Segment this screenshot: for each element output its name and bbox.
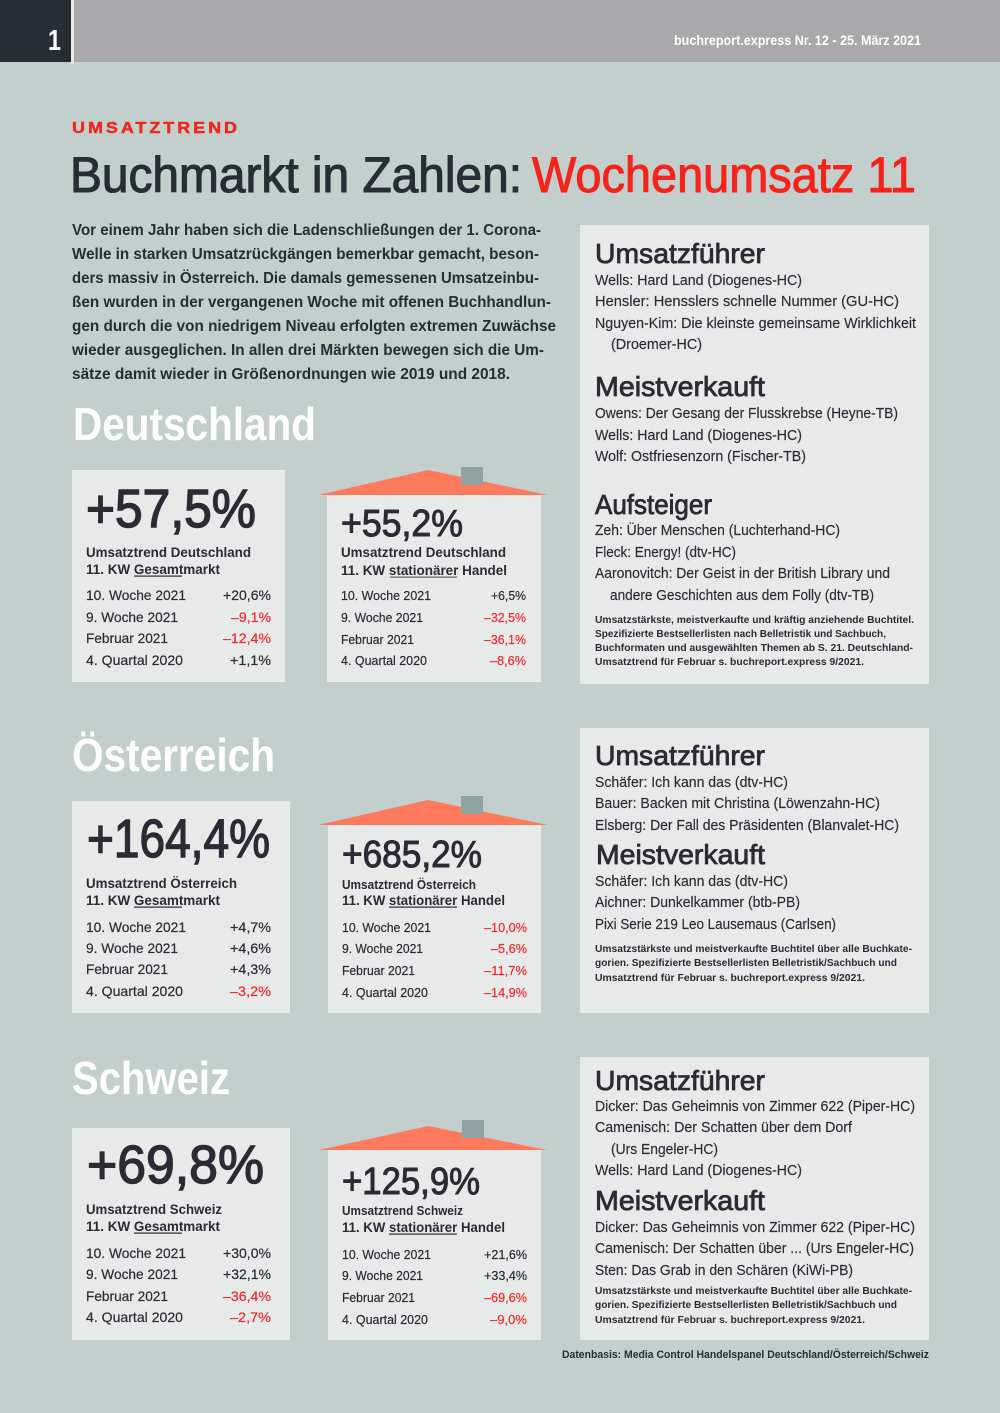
panel: Deutschland Bestseller: Owens: Der Gesang der Flusskrebse (Heyne-TB) xyxy=(595,406,898,422)
panel: Schweiz stationärer Handel xyxy=(319,1120,547,1340)
panel: Österreich Bestseller: Bauer: Backen mit Christina (Löwenzahn-HC) xyxy=(595,796,880,812)
panel: Österreich Gesamtmarkt: –3,2% xyxy=(230,983,271,999)
panel: Schweiz Bestseller: Camenisch: Der Schatten über ... (Urs Engeler-HC) xyxy=(595,1241,914,1257)
kicker: UMSATZTREND xyxy=(72,120,240,137)
panel: Österreich Gesamtmarkt: +4,7% xyxy=(230,919,271,935)
panel: Österreich Gesamtmarkt: 10. Woche 2021 xyxy=(86,919,186,935)
panel: Schweiz stationärer Handel: 4. Quartal 2020 xyxy=(342,1312,428,1327)
panel: Deutschland Bestseller: Meistverkauft xyxy=(595,371,765,402)
panel: Deutschland stationärer Handel: +55,2% xyxy=(341,503,463,545)
panel: Österreich Bestseller: gorien. Spezifizierte Bestsellerlisten Belletristik/Sachbuch und xyxy=(595,957,897,969)
panel: Deutschland Gesamtmarkt: Februar 2021 xyxy=(86,630,168,646)
panel: Deutschland Gesamtmarkt: Umsatztrend Deutschland xyxy=(86,544,251,560)
panel: Deutschland Bestseller: Aufsteiger xyxy=(595,489,712,520)
panel: Österreich Bestseller: Elsberg: Der Fall des Präsidenten (Blanvalet-HC) xyxy=(595,818,899,834)
panel: Deutschland Gesamtmarkt: +20,6% xyxy=(223,587,271,603)
panel: Schweiz Bestseller: (Urs Engeler-HC) xyxy=(611,1142,718,1158)
panel: Schweiz Gesamtmarkt xyxy=(72,1128,290,1340)
panel: Deutschland Bestseller: Wolf: Ostfriesenzorn (Fischer-TB) xyxy=(595,449,806,465)
intro text: wieder ausgeglichen. In allen drei Märkten bewegen sich die Um- xyxy=(71,342,544,359)
panel: Schweiz stationärer Handel: 11. KW stationärer Handel xyxy=(342,1219,505,1235)
panel: Schweiz stationärer Handel: +125,9% xyxy=(342,1161,480,1203)
panel: Deutschland Gesamtmarkt: –9,1% xyxy=(231,609,271,625)
panel: Schweiz Gesamtmarkt: 10. Woche 2021 xyxy=(86,1245,186,1261)
panel: Deutschland Gesamtmarkt: –12,4% xyxy=(223,630,271,646)
panel: Deutschland Gesamtmarkt: 11. KW Gesamtmarkt xyxy=(86,561,220,577)
panel: Österreich stationärer Handel: –10,0% xyxy=(484,920,527,935)
panel: Österreich stationärer Handel: 9. Woche 2021 xyxy=(342,941,423,956)
panel: Österreich Bestseller: Umsatztrend für Februar s. buchreport.express 9/2021. xyxy=(595,972,865,984)
panel: Schweiz Gesamtmarkt: 4. Quartal 2020 xyxy=(86,1309,183,1325)
panel: Österreich Gesamtmarkt: 9. Woche 2021 xyxy=(86,940,178,956)
panel: Deutschland stationärer Handel: 4. Quartal 2020 xyxy=(341,653,427,668)
panel: Schweiz Bestseller: gorien. Spezifizierte Bestsellerlisten Belletristik/Sachbuch und xyxy=(595,1299,897,1311)
panel: Schweiz Gesamtmarkt: 9. Woche 2021 xyxy=(86,1266,178,1282)
panel: Schweiz stationärer Handel: 10. Woche 2021 xyxy=(342,1247,431,1262)
header bar: 1 xyxy=(48,25,61,57)
panel: Deutschland Gesamtmarkt: +1,1% xyxy=(230,652,271,668)
panel: Schweiz Gesamtmarkt: +30,0% xyxy=(223,1245,271,1261)
panel: Österreich stationärer Handel: Umsatztrend Österreich xyxy=(342,877,476,892)
panel: Deutschland stationärer Handel: –8,6% xyxy=(490,653,526,668)
panel: Deutschland stationärer Handel xyxy=(318,467,548,682)
intro text xyxy=(71,222,556,383)
panel: Österreich Gesamtmarkt xyxy=(72,801,290,1013)
title: Buchmarkt in Zahlen: xyxy=(70,147,522,203)
panel: Österreich stationärer Handel: –14,9% xyxy=(484,985,527,1000)
panel: Deutschland Gesamtmarkt: 4. Quartal 2020 xyxy=(86,652,183,668)
panel: Österreich Bestseller: Schäfer: Ich kann das (dtv-HC) xyxy=(595,775,788,791)
intro text: gen durch die von niedrigem Niveau erfolgten extremen Zuwächse xyxy=(72,318,556,335)
panel: Schweiz Gesamtmarkt: 11. KW Gesamtmarkt xyxy=(86,1218,220,1234)
panel: Schweiz Gesamtmarkt: –36,4% xyxy=(223,1288,271,1304)
panel: Österreich stationärer Handel: 4. Quartal 2020 xyxy=(342,985,428,1000)
header bar: buchreport.express Nr. 12 - 25. März 2021 xyxy=(674,33,921,48)
panel: Deutschland Bestseller: Umsatzführer xyxy=(595,238,765,269)
panel: Deutschland Bestseller xyxy=(580,225,929,684)
panel: Deutschland Bestseller: Spezifizierte Bestsellerlisten nach Belletristik und Sachbuch, xyxy=(595,628,886,640)
panel: Deutschland Bestseller: andere Geschichten aus dem Folly (dtv-TB) xyxy=(610,588,874,604)
panel: Deutschland Gesamtmarkt: 10. Woche 2021 xyxy=(86,587,186,603)
panel: Österreich stationärer Handel: 11. KW stationärer Handel xyxy=(342,892,505,908)
header bar xyxy=(0,0,1000,64)
panel: Schweiz Bestseller: Meistverkauft xyxy=(595,1185,765,1216)
panel: Österreich stationärer Handel xyxy=(318,796,548,1013)
panel: Schweiz Gesamtmarkt: Umsatztrend Schweiz xyxy=(86,1201,222,1217)
panel: Deutschland Bestseller: Zeh: Über Menschen (Luchterhand-HC) xyxy=(595,521,840,539)
heading: Deutschland: Deutschland xyxy=(73,398,316,450)
panel: Deutschland Gesamtmarkt xyxy=(72,470,285,682)
panel: Österreich Bestseller xyxy=(580,728,929,1013)
intro text: Welle in starken Umsatzrückgängen bemerkbar gemacht, beson- xyxy=(72,246,539,263)
panel: Österreich Bestseller: Umsatzstärkste und meistverkaufte Buchtitel über alle Buchkate- xyxy=(595,943,912,955)
panel: Schweiz Bestseller: Umsatztrend für Februar s. buchreport.express 9/2021. xyxy=(595,1314,865,1326)
panel: Schweiz stationärer Handel: Februar 2021 xyxy=(342,1290,415,1305)
panel: Österreich Bestseller: Aichner: Dunkelkammer (btb-PB) xyxy=(595,895,800,911)
panel: Deutschland stationärer Handel: Umsatztrend Deutschland xyxy=(341,544,506,560)
panel: Österreich Gesamtmarkt: Februar 2021 xyxy=(86,961,168,977)
panel: Deutschland stationärer Handel: Februar 2021 xyxy=(341,632,414,647)
intro text: Vor einem Jahr haben sich die Ladenschließungen der 1. Corona- xyxy=(72,222,541,239)
panel: Schweiz Gesamtmarkt: +32,1% xyxy=(223,1266,271,1282)
panel: Deutschland stationärer Handel: 10. Woche 2021 xyxy=(341,588,431,603)
panel: Österreich Gesamtmarkt: +4,3% xyxy=(230,961,271,977)
panel: Deutschland Bestseller: Nguyen-Kim: Die kleinste gemeinsame Wirklichkeit xyxy=(595,316,916,332)
intro text: ders massiv in Österreich. Die damals gemessenen Umsatzeinbu- xyxy=(72,270,539,287)
heading: Schweiz: Schweiz xyxy=(72,1052,230,1104)
title: Wochenumsatz 11 xyxy=(532,147,916,203)
panel: Deutschland stationärer Handel: –36,1% xyxy=(484,632,526,647)
panel: Österreich Gesamtmarkt: +164,4% xyxy=(87,809,270,869)
panel: Österreich stationärer Handel: +685,2% xyxy=(342,834,482,876)
panel: Österreich Gesamtmarkt: 11. KW Gesamtmarkt xyxy=(86,892,220,908)
panel: Österreich Gesamtmarkt: Umsatztrend Österreich xyxy=(86,875,237,891)
panel: Österreich Bestseller: Umsatzführer xyxy=(595,740,765,771)
panel: Österreich stationärer Handel: 10. Woche 2021 xyxy=(342,920,431,935)
panel: Österreich Bestseller: Schäfer: Ich kann das (dtv-HC) xyxy=(595,874,788,890)
panel: Deutschland stationärer Handel: +6,5% xyxy=(491,588,526,603)
panel: Deutschland Gesamtmarkt: +57,5% xyxy=(86,479,256,539)
panel: Deutschland Bestseller: Aaronovitch: Der Geist in der British Library und xyxy=(595,566,890,582)
panel: Schweiz Gesamtmarkt: –2,7% xyxy=(230,1309,271,1325)
panel: Deutschland Bestseller: Buchformaten und ausgewählten Themen ab S. 21. Deutschland- xyxy=(595,642,913,654)
panel: Schweiz Gesamtmarkt: +69,8% xyxy=(87,1135,264,1195)
panel: Österreich stationärer Handel: –5,6% xyxy=(491,941,527,956)
panel: Österreich stationärer Handel: –11,7% xyxy=(484,963,527,978)
panel: Schweiz stationärer Handel: 9. Woche 2021 xyxy=(342,1268,423,1283)
source note: Datenbasis: Media Control Handelspanel Deutschland/Österreich/Schweiz xyxy=(562,1348,929,1361)
panel: Deutschland Bestseller: Wells: Hard Land (Diogenes-HC) xyxy=(595,273,802,289)
panel: Schweiz stationärer Handel: –9,0% xyxy=(490,1312,527,1327)
panel: Schweiz Bestseller: Umsatzführer xyxy=(595,1065,765,1096)
panel: Schweiz Bestseller: Dicker: Das Geheimnis von Zimmer 622 (Piper-HC) xyxy=(595,1220,915,1236)
panel: Schweiz stationärer Handel: +21,6% xyxy=(484,1247,527,1262)
panel: Schweiz Bestseller: Dicker: Das Geheimnis von Zimmer 622 (Piper-HC) xyxy=(595,1099,915,1115)
panel: Österreich Bestseller: Meistverkauft xyxy=(596,839,765,870)
panel: Schweiz stationärer Handel: –69,6% xyxy=(484,1290,527,1305)
panel: Österreich stationärer Handel: Februar 2021 xyxy=(342,963,415,978)
panel: Österreich Bestseller: Pixi Serie 219 Leo Lausemaus (Carlsen) xyxy=(595,917,836,933)
panel: Deutschland stationärer Handel: –32,5% xyxy=(484,610,526,625)
panel: Schweiz Bestseller: Camenisch: Der Schatten über dem Dorf xyxy=(595,1120,853,1136)
title xyxy=(70,147,916,203)
panel: Deutschland Bestseller: Umsatztrend für Februar s. buchreport.express 9/2021. xyxy=(595,656,864,668)
panel: Schweiz Gesamtmarkt: Februar 2021 xyxy=(86,1288,168,1304)
panel: Schweiz Bestseller: Umsatzstärkste und meistverkaufte Buchtitel über alle Buchkate- xyxy=(595,1285,912,1297)
panel: Schweiz Bestseller xyxy=(580,1057,929,1340)
panel: Deutschland Bestseller: Fleck: Energy! (dtv-HC) xyxy=(595,545,736,561)
panel: Schweiz Bestseller: Wells: Hard Land (Diogenes-HC) xyxy=(595,1163,802,1179)
panel: Österreich Gesamtmarkt: 4. Quartal 2020 xyxy=(86,983,183,999)
panel: Deutschland stationärer Handel: 11. KW stationärer Handel xyxy=(341,562,507,578)
panel: Deutschland Bestseller: Wells: Hard Land (Diogenes-HC) xyxy=(595,428,802,444)
panel: Schweiz Bestseller: Sten: Das Grab in den Schären (KiWi-PB) xyxy=(595,1263,853,1279)
panel: Deutschland Bestseller: Hensler: Hensslers schnelle Nummer (GU-HC) xyxy=(595,294,899,310)
intro text: sätze damit wieder in Größenordnungen wie 2019 und 2018. xyxy=(72,366,510,383)
intro text: ßen wurden in der vergangenen Woche mit offenen Buchhandlun- xyxy=(72,294,551,311)
panel: Deutschland Bestseller: (Droemer-HC) xyxy=(611,337,702,353)
heading: Österreich: Österreich xyxy=(72,729,275,781)
panel: Schweiz stationärer Handel: Umsatztrend Schweiz xyxy=(342,1204,463,1218)
panel: Deutschland Gesamtmarkt: 9. Woche 2021 xyxy=(86,609,178,625)
panel: Österreich Gesamtmarkt: +4,6% xyxy=(230,940,271,956)
panel: Deutschland stationärer Handel: 9. Woche 2021 xyxy=(341,610,423,625)
panel: Schweiz stationärer Handel: +33,4% xyxy=(484,1268,527,1283)
panel: Deutschland Bestseller: Umsatzstärkste, meistverkaufte und kräftig anziehende Buchtitel. xyxy=(595,614,914,626)
